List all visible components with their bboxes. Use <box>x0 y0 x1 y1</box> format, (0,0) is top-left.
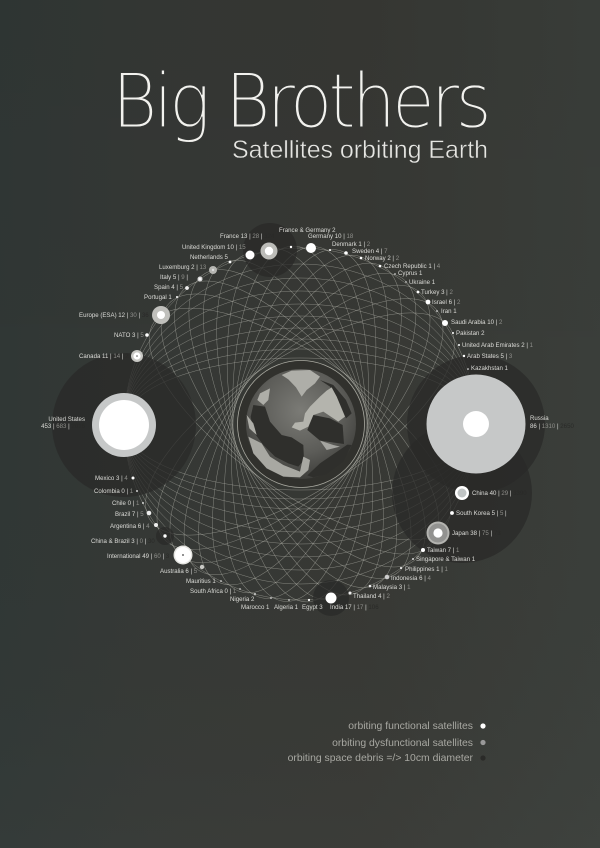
Marocco: Marocco 1 <box>241 604 270 611</box>
Russia: Russia <box>530 415 549 422</box>
Philippines: Philippines 1 | 1 <box>405 566 449 573</box>
legend <box>288 721 486 764</box>
Thailand: Thailand 4 | 2 <box>353 593 390 600</box>
United States <box>41 393 156 457</box>
France and Germany: France & Germany 2 <box>279 227 336 234</box>
Egypt: Egypt 3 <box>302 604 323 611</box>
Germany <box>306 233 354 253</box>
India: India 17 | 17 | 106 <box>330 604 379 611</box>
United States: United States <box>48 416 85 423</box>
Russia <box>426 374 574 474</box>
Taiwan: Taiwan 7 | 1 <box>427 547 460 554</box>
Denmark <box>329 241 371 251</box>
Canada: Canada 11 | 14 | 2 <box>79 353 129 360</box>
Portugal: Portugal 1 <box>144 294 172 301</box>
Germany: Germany 10 | 18 <box>308 233 354 240</box>
Egypt <box>302 599 323 611</box>
Russia: 86 | 1310 | 2650 <box>530 423 574 430</box>
France: France 13 | 28 | 324 <box>220 233 275 240</box>
Canada <box>79 350 143 362</box>
Algeria: Algeria 1 <box>274 604 299 611</box>
orbit mesh <box>114 234 486 614</box>
Israel: Israel 6 | 2 <box>432 299 461 306</box>
France <box>220 233 278 260</box>
Algeria <box>274 599 299 611</box>
Saudi Arabia: Saudi Arabia 10 | 2 <box>451 319 503 326</box>
Iran: Iran 1 <box>441 308 457 315</box>
Australia: Australia 6 | 5 <box>160 568 198 575</box>
Czech Republic: Czech Republic 1 | 4 <box>384 263 441 270</box>
Argentina: Argentina 6 | 4 <box>110 523 150 530</box>
Netherlands: Netherlands 5 <box>190 254 229 261</box>
Sweden: Sweden 4 | 7 <box>352 248 388 255</box>
legend: dysfunctional: orbiting dysfunctional satellites <box>332 738 473 749</box>
debris discs <box>52 223 545 616</box>
Singapore and Taiwan: Singapore & Taiwan 1 <box>416 556 476 563</box>
Pakistan: Pakistan 2 <box>456 330 485 337</box>
China and Brazil <box>91 534 167 545</box>
title: Big Brothers <box>112 57 488 145</box>
China and Brazil: China & Brazil 3 | 0 | 30 <box>91 538 155 545</box>
legend: debris: orbiting space debris =/> 10cm diameter <box>288 753 474 764</box>
Marocco <box>241 597 272 611</box>
Arab States: Arab States 5 | 3 <box>467 353 513 360</box>
Indonesia: Indonesia 6 | 4 <box>391 575 431 582</box>
China <box>455 486 527 500</box>
Mauritius: Mauritius 1 <box>186 578 216 585</box>
International: International 49 | 60 | 3 <box>107 553 170 560</box>
International <box>107 546 192 564</box>
legend: functional: orbiting functional satellites <box>348 721 473 732</box>
Australia <box>160 565 204 575</box>
Ukraine: Ukraine 1 <box>409 279 436 286</box>
Turkey: Turkey 3 | 2 <box>421 289 453 296</box>
Kazakhstan: Kazakhstan 1 <box>471 365 509 372</box>
Mexico: Mexico 3 | 4 <box>95 475 128 482</box>
Chile: Chile 0 | 1 <box>112 500 140 507</box>
Denmark: Denmark 1 | 2 <box>332 241 371 248</box>
China: China 40 | 29 | 3390 <box>472 490 527 497</box>
subtitle: Satellites orbiting Earth <box>232 136 488 164</box>
South Africa: South Africa 0 | 1 <box>190 588 237 595</box>
Nigeria <box>230 593 256 603</box>
Norway: Norway 2 | 2 <box>365 255 400 262</box>
Spain: Spain 4 | 5 <box>154 284 184 291</box>
satellites and labels <box>41 227 574 611</box>
Nigeria: Nigeria 2 <box>230 596 255 603</box>
Malaysia: Malaysia 3 | 1 <box>373 584 411 591</box>
India <box>326 592 379 611</box>
Brazil: Brazil 7 | 5 <box>115 511 144 518</box>
Italy <box>160 274 202 282</box>
Japan <box>426 522 501 544</box>
earth <box>238 360 364 488</box>
United Kingdom: United Kingdom 10 | 15 <box>182 244 246 251</box>
NATO: NATO 3 | 5 <box>114 332 144 339</box>
Europe ESA <box>79 306 170 324</box>
Luxemburg <box>159 264 217 274</box>
France and Germany <box>279 227 336 248</box>
Cyprus: Cyprus 1 <box>398 270 423 277</box>
Europe ESA: Europe (ESA) 12 | 30 | 36 <box>79 312 149 319</box>
South Korea: South Korea 5 | 5 | <box>456 510 507 517</box>
United Kingdom <box>182 244 254 260</box>
Luxemburg: Luxemburg 2 | 13 <box>159 264 207 271</box>
United States: 453 | 683 | 2016 <box>41 423 86 430</box>
Colombia: Colombia 0 | 1 <box>94 488 134 495</box>
Japan: Japan 38 | 75 | 73 <box>452 530 501 537</box>
Netherlands <box>190 254 231 263</box>
Italy: Italy 5 | 9 | <box>160 274 188 281</box>
United Arab Emirates: United Arab Emirates 2 | 1 <box>462 342 534 349</box>
